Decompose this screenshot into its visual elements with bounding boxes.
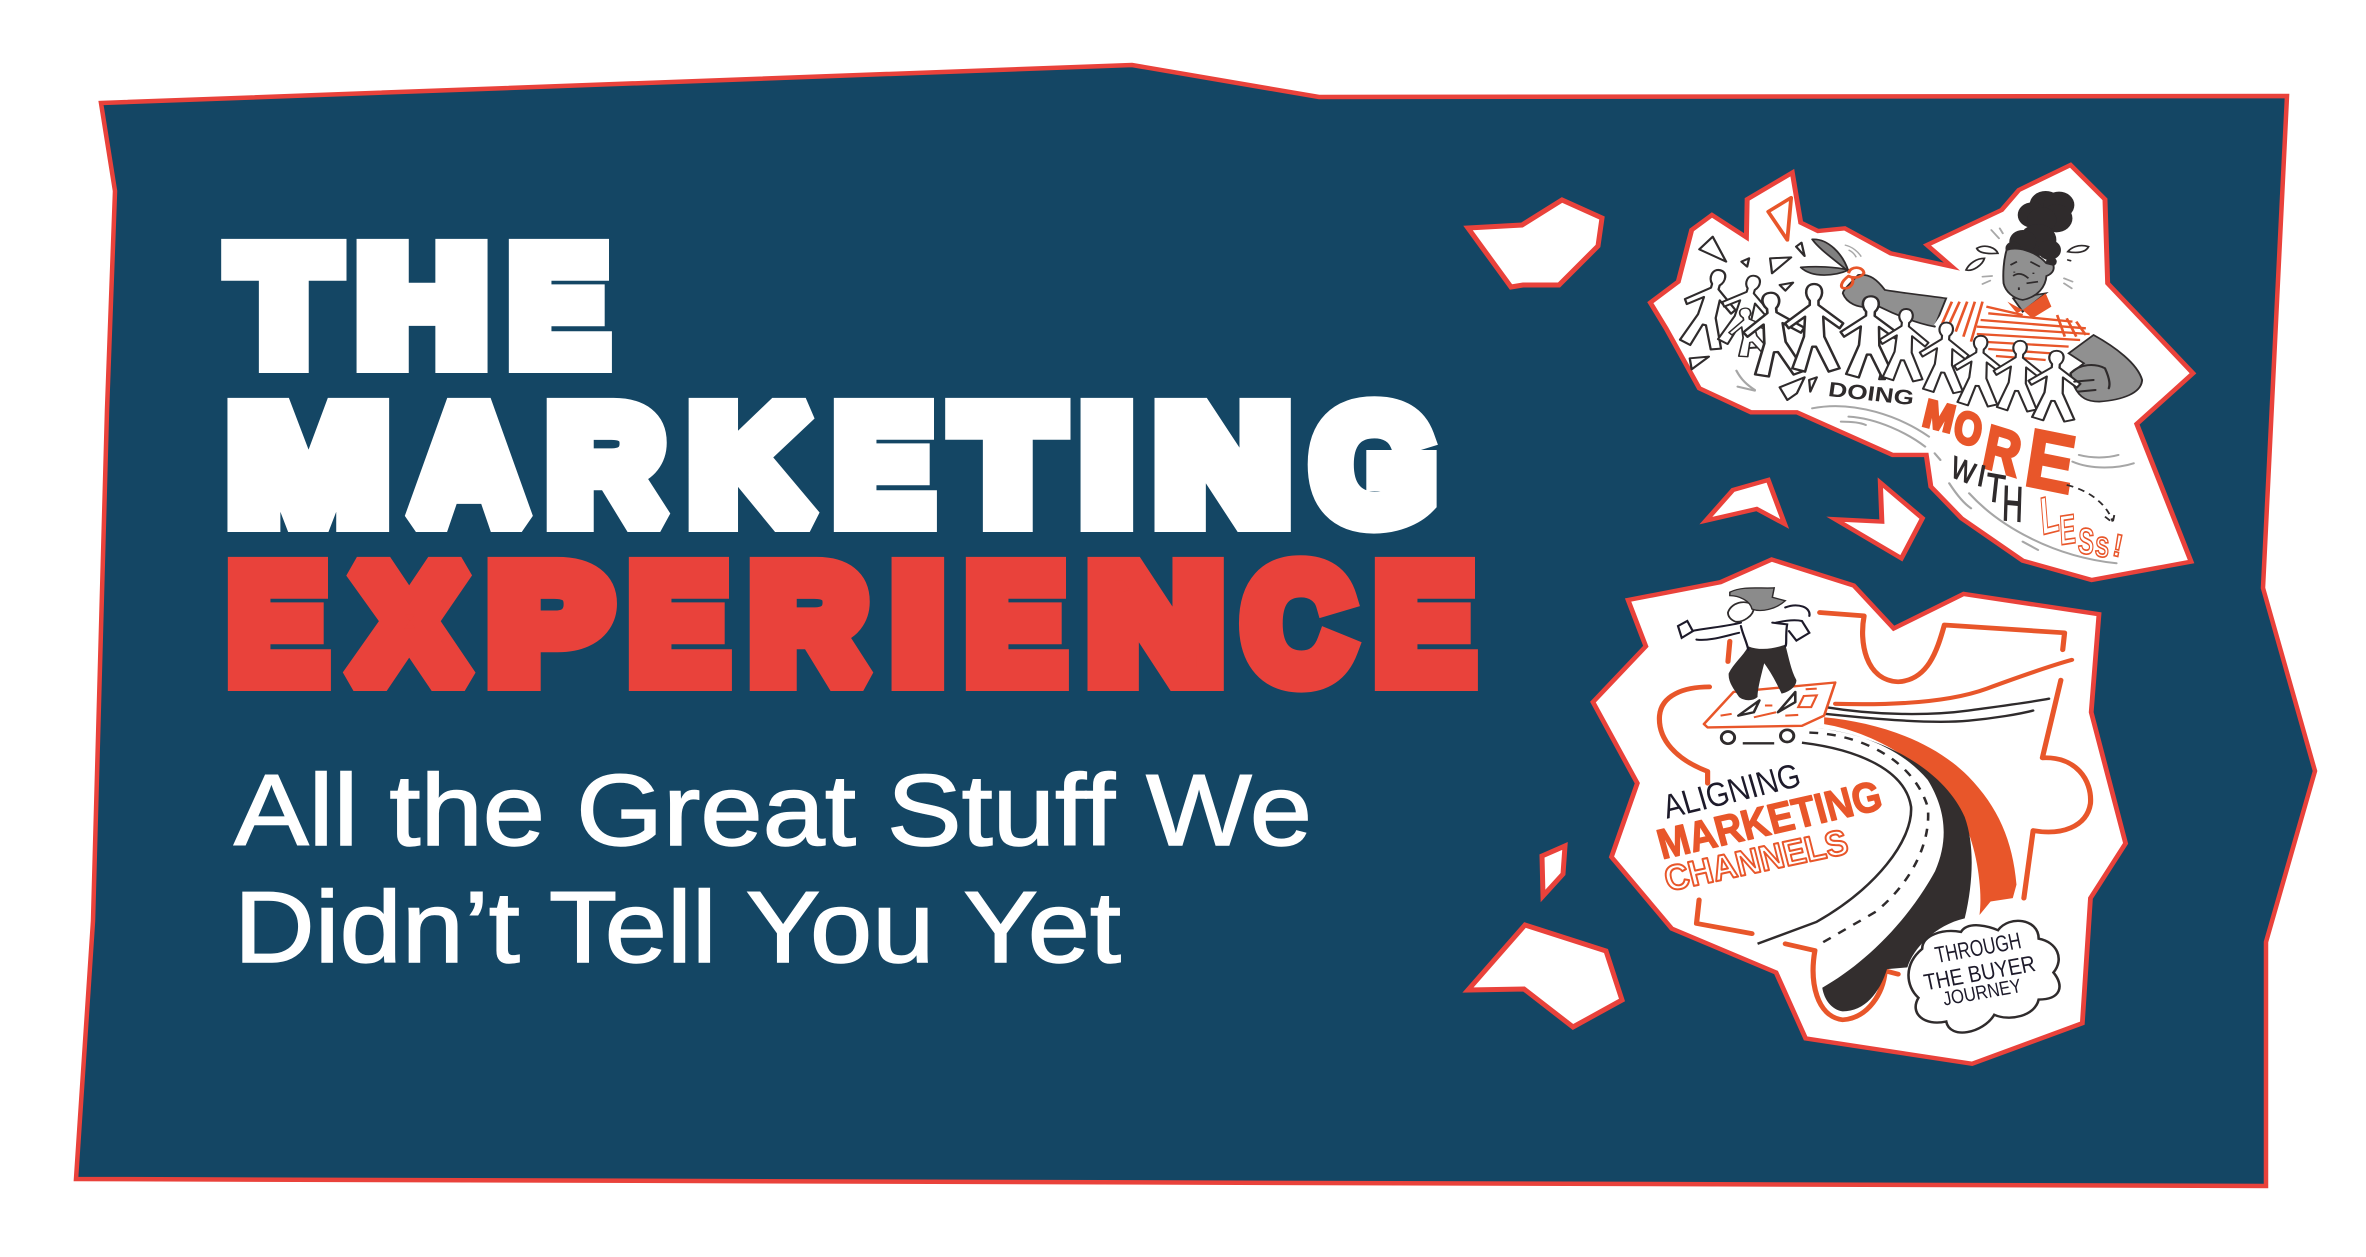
text: WITH: H (2001, 475, 2025, 532)
title: THE: T (232, 216, 336, 395)
cloud text line 3: JOURNEY (1941, 975, 2024, 1010)
text: LESS!: E (2056, 506, 2077, 554)
title: MARKETING: G (1313, 375, 1435, 554)
small shard left (1706, 480, 1785, 524)
text: DOING: DOING (1827, 378, 1916, 410)
title: MARKETING: N (1156, 375, 1289, 554)
puzzle piece outline (1659, 613, 2091, 1020)
text: WITH: T (1983, 465, 2009, 511)
cloud: through the buyer journey (1909, 921, 2060, 1033)
title: EXPERIENCE: C (1244, 534, 1351, 713)
title: EXPERIENCE: E (967, 534, 1064, 713)
title: EXPERIENCE: N (1089, 534, 1222, 713)
title: MARKETING: R (548, 375, 664, 554)
torn paper shard: main (1650, 165, 2193, 580)
shard: bottom left (1468, 925, 1622, 1027)
text: MARKETING: MARKETING (1652, 772, 1887, 869)
dark road band (1817, 728, 1972, 1011)
title: MARKETING: K (690, 375, 811, 554)
subtitle line 1: All the Great Stuff We (234, 755, 1312, 867)
title: EXPERIENCE: I (893, 534, 943, 713)
grey motion lines (1736, 371, 2134, 563)
text: MORE: E (2019, 411, 2085, 509)
orange road band (1824, 717, 2016, 915)
scissors (1801, 239, 1864, 288)
text: LESS!: S (2077, 520, 2097, 562)
woman: neck (2013, 293, 2046, 312)
woman: arm reaching left (1843, 275, 1946, 327)
paper doll chain (1673, 265, 2083, 422)
hand fingers (2071, 365, 2110, 392)
text: MORE: R (1977, 413, 2031, 487)
title: THE: H (358, 216, 486, 395)
subtitle line 2: Didn’t Tell You Yet (234, 872, 1121, 984)
title: EXPERIENCE: R (751, 534, 866, 713)
skateboard (1704, 682, 1835, 744)
title: MARKETING: I (1082, 375, 1132, 554)
torn paper shard (1593, 559, 2126, 1064)
illustration: aligning marketing channels (1593, 559, 2126, 1064)
text: LESS!: L (2034, 486, 2062, 547)
woman: hair (2005, 191, 2074, 266)
text: WITH: W (1947, 449, 1982, 489)
title: MARKETING: M (229, 375, 388, 554)
title: THE: E (510, 216, 607, 395)
woman: arm with hand on right (2069, 335, 2142, 402)
title: EXPERIENCE: E (229, 534, 326, 713)
skater (1678, 588, 1810, 716)
title: EXPERIENCE: X (352, 534, 466, 713)
woman: shirt (1934, 300, 2095, 363)
text: LESS!: ! (2110, 528, 2127, 564)
title: EXPERIENCE: E (630, 534, 727, 713)
woman: face (2003, 249, 2054, 300)
text: WITH: I (1974, 459, 1990, 493)
cloud text line 2: THE BUYER (1922, 951, 2038, 996)
title: EXPERIENCE: P (489, 534, 610, 713)
woman: collar (2007, 293, 2051, 318)
speed lines (1826, 660, 2072, 722)
sweat drops and stress marks (1966, 228, 2089, 288)
text: CHANNELS: CHANNELS (1660, 821, 1852, 899)
road dashes (1809, 733, 1928, 944)
dashed arrow (2067, 485, 2115, 523)
shard: top left (1468, 200, 1602, 287)
title: EXPERIENCE: E (1376, 534, 1473, 713)
text: MORE: M (1919, 392, 1961, 440)
title: MARKETING: A (412, 375, 526, 554)
illustration: doing more with less (1650, 165, 2193, 580)
small shard right (1835, 483, 1922, 558)
cloud text line 1: THROUGH (1933, 928, 2023, 969)
text: MORE: O (1949, 401, 1990, 455)
shard: small sliver (1542, 846, 1565, 896)
paper fragments (1690, 198, 1885, 400)
road edge line (1758, 743, 1911, 944)
text: LESS!: S (2094, 531, 2111, 563)
title: MARKETING: T (956, 375, 1060, 554)
title: MARKETING: E (835, 375, 932, 554)
text: ALIGNING: ALIGNING (1658, 756, 1805, 826)
